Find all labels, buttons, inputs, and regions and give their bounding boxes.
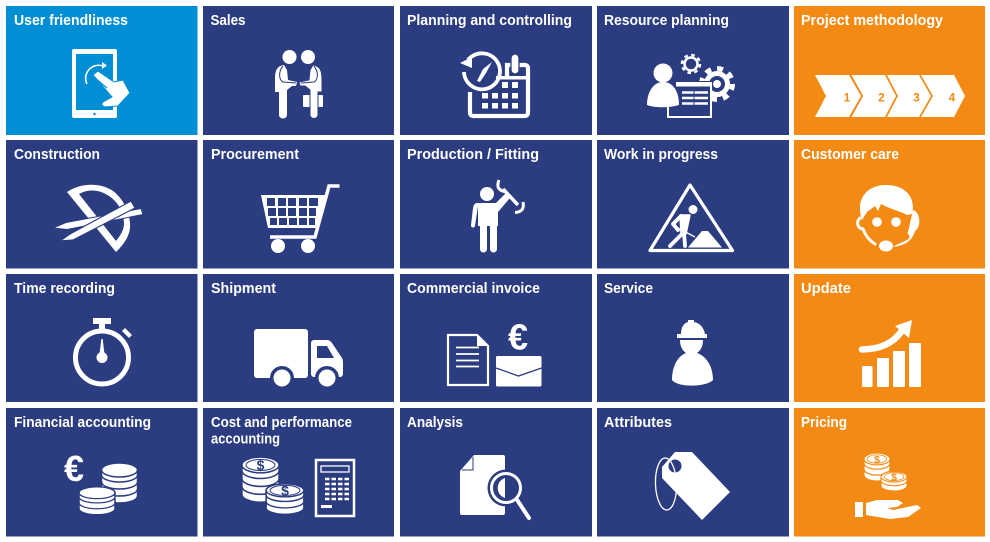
panel: Sales bbox=[203, 6, 394, 135]
icon: worker with helmet bbox=[672, 320, 713, 386]
icon: tablet with touching hand bbox=[72, 49, 130, 118]
icon: road works sign bbox=[650, 185, 732, 250]
heading: Sales bbox=[210, 13, 246, 29]
heading: Customer care bbox=[801, 147, 899, 163]
heading: Financial accounting bbox=[14, 415, 151, 431]
icon: four process chevrons bbox=[815, 75, 965, 117]
panel: Update bbox=[794, 274, 985, 402]
icon: euro and coins: € bbox=[64, 448, 84, 489]
icon: four process chevrons: 1 bbox=[844, 90, 851, 104]
icon: dollar coins and calculator: $ bbox=[281, 482, 289, 498]
icon: dollar coins and calculator bbox=[242, 457, 354, 516]
heading line 2: accounting bbox=[211, 432, 280, 448]
icon: four process chevrons: 4 bbox=[949, 90, 956, 104]
heading: Time recording bbox=[14, 281, 115, 297]
heading: Resource planning bbox=[604, 13, 729, 29]
icon: delivery truck bbox=[254, 329, 343, 390]
icon: protractor and pencils bbox=[53, 185, 143, 252]
panel: Service bbox=[597, 274, 789, 402]
panel: Project methodology bbox=[794, 6, 985, 135]
icon: man with wrench bbox=[471, 180, 523, 253]
heading: Procurement bbox=[211, 147, 299, 163]
heading: Analysis bbox=[407, 415, 463, 431]
heading: Construction bbox=[14, 147, 100, 163]
icon: invoice, euro and envelope: € bbox=[508, 316, 528, 358]
heading: Service bbox=[604, 281, 653, 297]
heading: Commercial invoice bbox=[407, 281, 540, 297]
heading: Pricing bbox=[801, 415, 847, 431]
icon: coins over open hand bbox=[855, 453, 921, 519]
icon: handshake bbox=[275, 50, 323, 118]
panel: Attributes bbox=[597, 408, 789, 536]
panel: Construction bbox=[6, 140, 198, 268]
panel: Time recording bbox=[6, 274, 198, 402]
heading: User friendliness bbox=[14, 13, 128, 29]
panel: Financial accounting bbox=[6, 408, 198, 536]
icon: document and magnifier bbox=[460, 455, 529, 518]
icon: shopping cart bbox=[261, 186, 340, 253]
icon: headset agent bbox=[858, 185, 919, 252]
icon: dollar coins and calculator: $ bbox=[257, 457, 265, 473]
heading: Planning and controlling bbox=[407, 13, 572, 29]
heading: Production / Fitting bbox=[407, 147, 539, 163]
icon: calendar and clock bbox=[460, 53, 528, 116]
panel: Cost and performance accounting bbox=[203, 408, 394, 536]
icon: four process chevrons: 2 bbox=[878, 90, 885, 104]
heading: Attributes bbox=[604, 415, 672, 431]
panel: Analysis bbox=[400, 408, 592, 536]
icon: four process chevrons: 3 bbox=[913, 90, 920, 104]
icon: stopwatch bbox=[76, 318, 132, 384]
icon: euro and coins bbox=[64, 448, 138, 515]
heading: Work in progress bbox=[604, 147, 718, 163]
icon: price tag bbox=[655, 452, 730, 520]
icon: coins over open hand: $ bbox=[874, 454, 880, 466]
panel: Resource planning bbox=[597, 6, 789, 135]
heading: Update bbox=[801, 281, 851, 297]
panel: Customer care bbox=[794, 140, 985, 268]
panel: Procurement bbox=[203, 140, 394, 268]
panel: Work in progress bbox=[597, 140, 789, 268]
icon: person, table and gears bbox=[647, 55, 732, 118]
panel: User friendliness bbox=[6, 6, 198, 135]
heading: Shipment bbox=[211, 281, 276, 297]
heading: Cost and performance bbox=[211, 415, 352, 431]
icon: coins over open hand: $ bbox=[891, 472, 897, 484]
icon: invoice, euro and envelope bbox=[448, 316, 542, 386]
panel: Pricing bbox=[794, 408, 985, 536]
panel: Shipment bbox=[203, 274, 394, 402]
heading: Project methodology bbox=[801, 13, 943, 29]
panel: Commercial invoice bbox=[400, 274, 592, 402]
icon: growth chart with arrow bbox=[862, 320, 921, 387]
panel: Production / Fitting bbox=[400, 140, 592, 268]
panel: Planning and controlling bbox=[400, 6, 592, 135]
